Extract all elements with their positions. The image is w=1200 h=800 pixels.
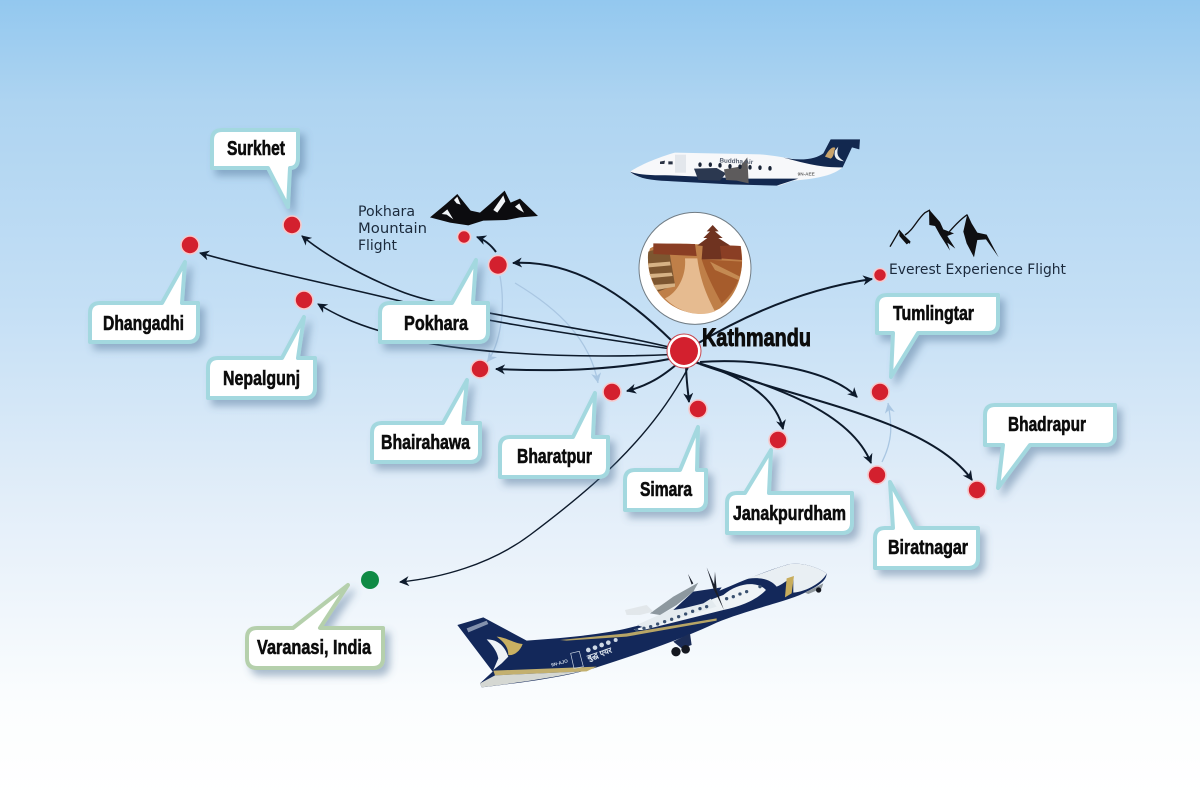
tail cap	[467, 621, 488, 632]
Kathmandu photo	[639, 212, 751, 324]
callout: Bharatpur	[500, 393, 608, 477]
right roofs	[702, 259, 742, 303]
gold nose band	[785, 576, 794, 597]
belly stripe	[630, 172, 798, 186]
label: Pokhara Mountain Flight: Pokhara	[358, 204, 415, 220]
propeller	[688, 567, 724, 610]
callout: Bhadrapur	[985, 405, 1115, 488]
callout: Simara	[625, 427, 706, 510]
pagoda	[697, 225, 730, 259]
callout: Dhangadhi: Dhangadhi	[103, 313, 184, 335]
callout: Tumlingtar	[877, 295, 998, 377]
rear windows	[586, 638, 618, 652]
callout: Bhairahawa	[372, 380, 480, 462]
outer engine and wing	[724, 157, 749, 183]
destination dots	[181, 216, 986, 589]
callout: Nepalgunj	[208, 317, 315, 398]
Kathmandu hub: Kathmandu	[702, 324, 811, 352]
callout: Pokhara	[380, 260, 488, 342]
airline name: Buddha Air	[719, 157, 754, 166]
tail logo	[487, 639, 508, 670]
street	[665, 258, 715, 314]
callout: Surkhet: Surkhet	[227, 138, 285, 160]
callout: Biratnagar: Biratnagar	[888, 537, 968, 559]
photo circle	[639, 212, 751, 324]
route arrows from Kathmandu	[200, 236, 972, 582]
callout: Varanasi, India	[247, 585, 383, 668]
square ground	[648, 244, 742, 314]
callout: Janakpurdham: Janakpurdham	[733, 503, 846, 525]
label: Pokhara Mountain Flight: Flight	[358, 238, 397, 254]
wing root band	[637, 593, 717, 628]
callout: Tumlingtar: Tumlingtar	[893, 303, 974, 325]
Nepali airline name: बुद्ध एयर	[585, 646, 614, 664]
cockpit windows	[660, 161, 673, 164]
cabin door	[675, 155, 686, 173]
callout: Varanasi, India: Varanasi, India	[257, 637, 372, 659]
hull	[457, 564, 827, 687]
tail logo	[825, 147, 835, 159]
right roof ridge	[710, 262, 740, 280]
callout: Janakpurdham	[727, 450, 852, 533]
rear door	[571, 651, 583, 668]
callout: Biratnagar	[875, 482, 978, 568]
small aircraft	[630, 139, 860, 186]
large aircraft	[457, 564, 827, 687]
label: Pokhara Mountain Flight	[358, 204, 427, 254]
inner engine	[694, 168, 726, 181]
back buildings	[653, 243, 742, 260]
registration: 9N-AEE	[798, 172, 815, 177]
white upper body	[742, 564, 827, 593]
callout: Bhadrapur: Bhadrapur	[1008, 414, 1086, 436]
landing gear	[673, 633, 692, 648]
temple tiers	[648, 262, 675, 290]
pale connecting arrows	[487, 276, 891, 462]
wing	[650, 583, 698, 615]
callout: Nepalgunj: Nepalgunj	[223, 368, 300, 390]
second dark ridge	[963, 214, 999, 257]
Everest mountain icon	[890, 209, 999, 257]
tail fin	[783, 139, 860, 167]
small left peak	[899, 231, 911, 244]
engine nacelle	[673, 587, 722, 610]
registration: 9N-AJO	[551, 658, 569, 668]
Pokhara mountain icon	[430, 191, 538, 225]
cabin windows	[698, 162, 772, 171]
belly	[480, 672, 580, 687]
white cabin panel	[633, 584, 766, 630]
callout: Pokhara: Pokhara	[404, 313, 469, 335]
fuselage	[630, 153, 843, 185]
cabin windows	[635, 585, 762, 632]
callout: Bharatpur: Bharatpur	[517, 446, 592, 468]
callout: Surkhet	[212, 130, 298, 207]
label: Pokhara Mountain Flight: Mountain	[358, 221, 427, 237]
callout: Dhangadhi	[90, 262, 198, 342]
first dark ridge	[929, 209, 955, 251]
callout: Simara: Simara	[640, 479, 693, 501]
callout: Bhairahawa: Bhairahawa	[381, 432, 471, 454]
Kathmandu hub	[667, 324, 811, 368]
left outline ridges	[890, 210, 967, 247]
label: Everest Experience Flight: Everest Experience Flight	[889, 262, 1066, 278]
gold lower stripe	[493, 667, 597, 675]
gold cheatline	[560, 618, 717, 641]
left temples	[648, 249, 675, 292]
